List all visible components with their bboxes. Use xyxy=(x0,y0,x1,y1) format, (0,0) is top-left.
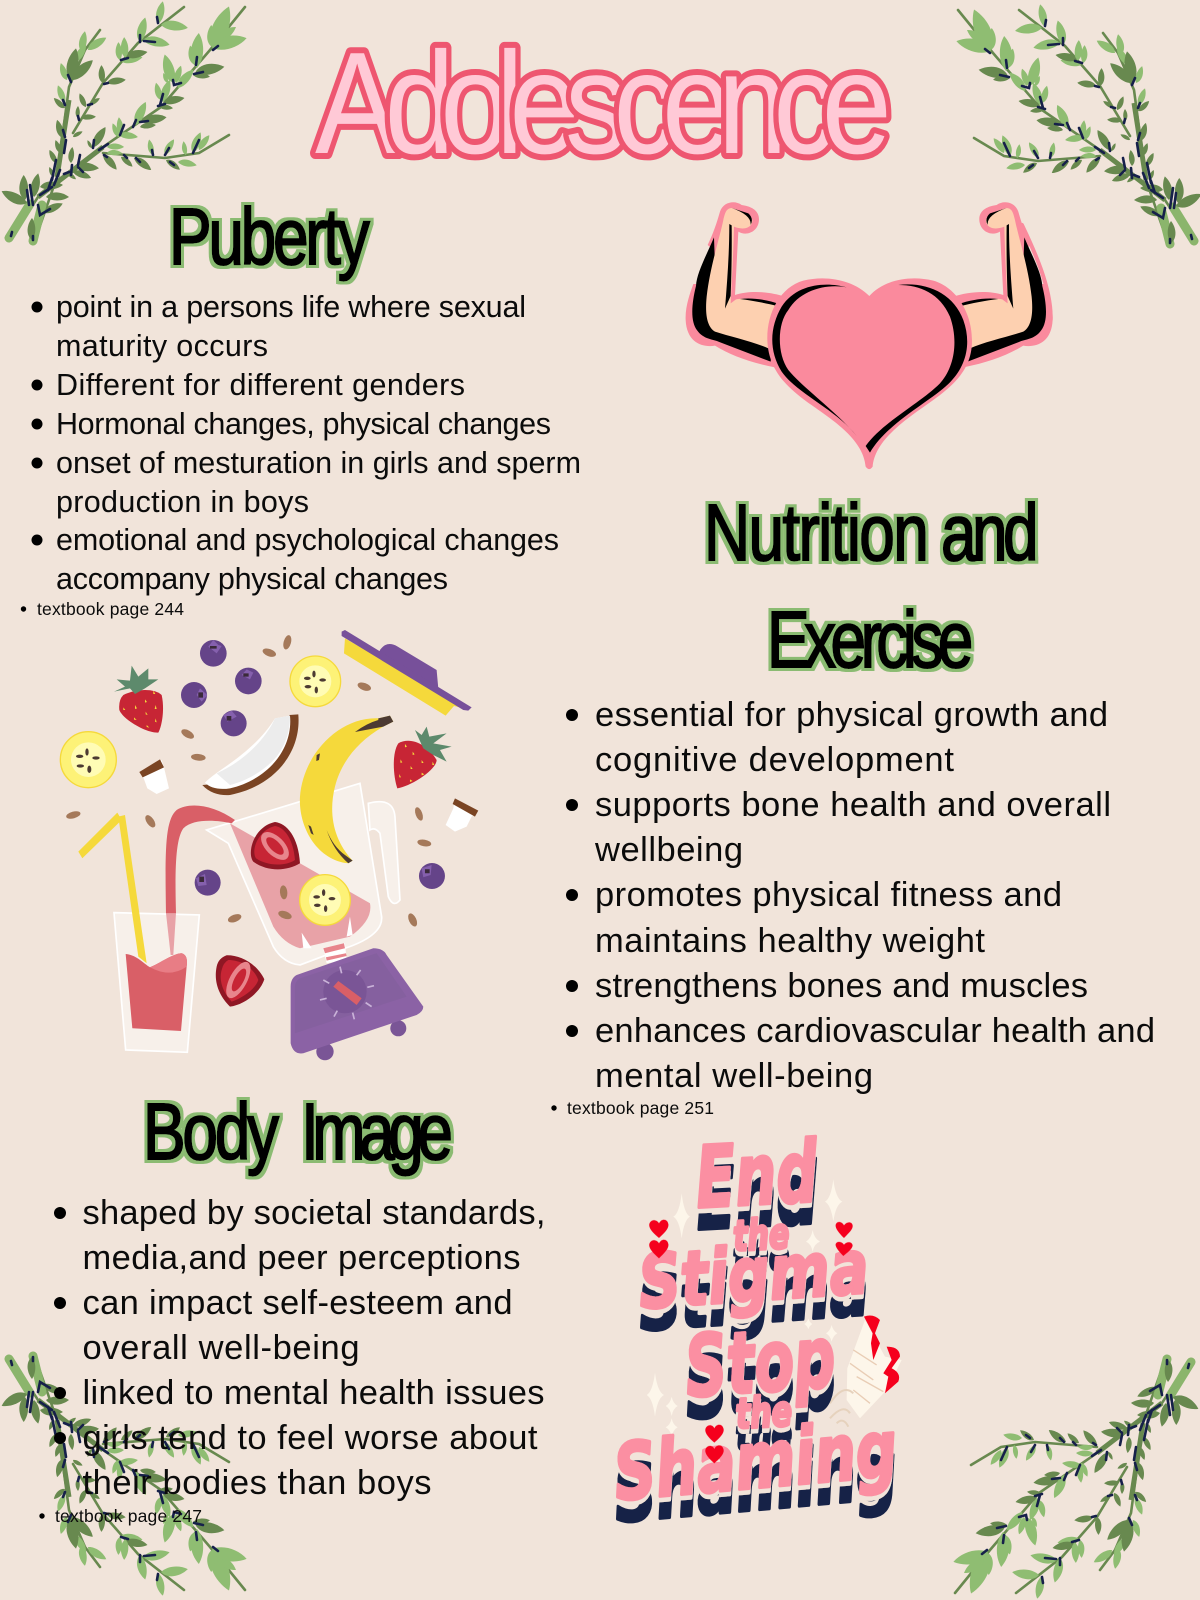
bullet list: nutrition and exercise: promotes physical fitness and xyxy=(595,876,1062,914)
bullet list: body image: their bodies than boys xyxy=(82,1464,432,1502)
cut strawberries xyxy=(216,822,300,1007)
bullet list: nutrition and exercise: strengthens bones and muscles xyxy=(595,967,1088,1005)
blender base xyxy=(291,948,423,1060)
bullet list: nutrition and exercise: enhances cardiovascular health and xyxy=(595,1012,1155,1050)
smoothie pour xyxy=(166,806,235,913)
lettering: Shaming xyxy=(610,1404,901,1519)
lettering: Stigma xyxy=(636,1222,871,1326)
bullet list: nutrition and exercise: essential for physical growth and xyxy=(595,696,1108,734)
bullet list: nutrition and exercise xyxy=(566,696,1155,1095)
bullet list: body image: overall well-being xyxy=(82,1329,360,1367)
citation: textbook page 251: textbook page 251 xyxy=(567,1098,714,1118)
decoration: top-right herb sprig xyxy=(955,4,1200,246)
whole strawberries xyxy=(114,666,452,788)
decoration: bottom-right herb sprig xyxy=(952,1357,1200,1599)
bullet list: body image xyxy=(54,1194,546,1502)
citation: textbook page 247: textbook page 247 xyxy=(55,1506,202,1526)
bullet list: nutrition and exercise: cognitive development xyxy=(595,741,954,779)
bullet list: puberty: onset of mesturation in girls and sperm xyxy=(56,446,581,480)
heading: Body Image: Image xyxy=(301,1087,453,1177)
bullet list: nutrition and exercise: mental well-being xyxy=(595,1057,873,1095)
sparkles xyxy=(647,1179,842,1437)
decoration: top-left herb sprig xyxy=(0,1,248,243)
illustration: End the Stigma Stop the Shaming xyxy=(610,1123,902,1519)
lettering: Stop xyxy=(682,1308,838,1418)
bullet list: puberty: Different for different genders xyxy=(56,368,465,402)
bullet list: puberty: emotional and psychological changes xyxy=(56,523,559,557)
heading: Puberty: Puberty xyxy=(169,192,370,282)
bullet list: puberty: production in boys xyxy=(56,485,309,519)
banana slices xyxy=(60,656,350,925)
coconut chunks xyxy=(139,759,478,832)
bullet list: nutrition and exercise: wellbeing xyxy=(594,831,743,869)
heading: Body Image: Body xyxy=(143,1087,280,1177)
bullet list: puberty: maturity occurs xyxy=(56,329,268,363)
blender jar xyxy=(207,783,400,965)
bullet list: body image: linked to mental health issues xyxy=(82,1374,544,1412)
heading: Nutrition and xyxy=(704,488,1039,578)
lettering: End xyxy=(693,1123,821,1228)
heading: Exercise: Exercise xyxy=(767,595,973,685)
lettering: the xyxy=(735,1386,793,1438)
icon: flexing heart with arms xyxy=(686,202,1053,469)
bullet list: puberty: Hormonal changes, physical changes xyxy=(56,407,551,441)
bullet list: body image: girls tend to feel worse about xyxy=(82,1419,538,1457)
bullet list: body image: shaped by societal standards, xyxy=(82,1194,546,1232)
drinking glass xyxy=(78,813,199,1052)
bullet list: body image: media,and peer perceptions xyxy=(82,1239,520,1277)
bullet list: puberty: point in a persons life where sexual xyxy=(56,290,526,324)
lettering xyxy=(610,1123,901,1519)
bullet list: puberty xyxy=(32,290,581,596)
blueberries xyxy=(181,640,445,896)
heading: Body Image xyxy=(143,1087,453,1177)
blender lid xyxy=(342,630,472,716)
bullet list: body image: can impact self-esteem and xyxy=(82,1284,512,1322)
bullet list: puberty: accompany physical changes xyxy=(56,562,448,596)
coconut xyxy=(202,714,299,795)
lettering: the xyxy=(732,1209,790,1261)
banana xyxy=(300,716,393,863)
title: Adolescence xyxy=(315,22,892,184)
illustration: smoothie blender xyxy=(60,630,478,1060)
seeds xyxy=(65,634,432,928)
hearts xyxy=(649,1220,853,1463)
bullet list: nutrition and exercise: supports bone health and overall xyxy=(595,786,1111,824)
heading: Nutrition and: Nutrition xyxy=(704,488,929,578)
bullet list: nutrition and exercise: maintains healthy weight xyxy=(595,922,985,960)
shaming hand xyxy=(830,1316,902,1427)
decoration: bottom-left herb sprig xyxy=(0,1354,248,1596)
citation: textbook page 244: textbook page 244 xyxy=(37,599,184,619)
heading: Nutrition and: and xyxy=(941,488,1039,578)
